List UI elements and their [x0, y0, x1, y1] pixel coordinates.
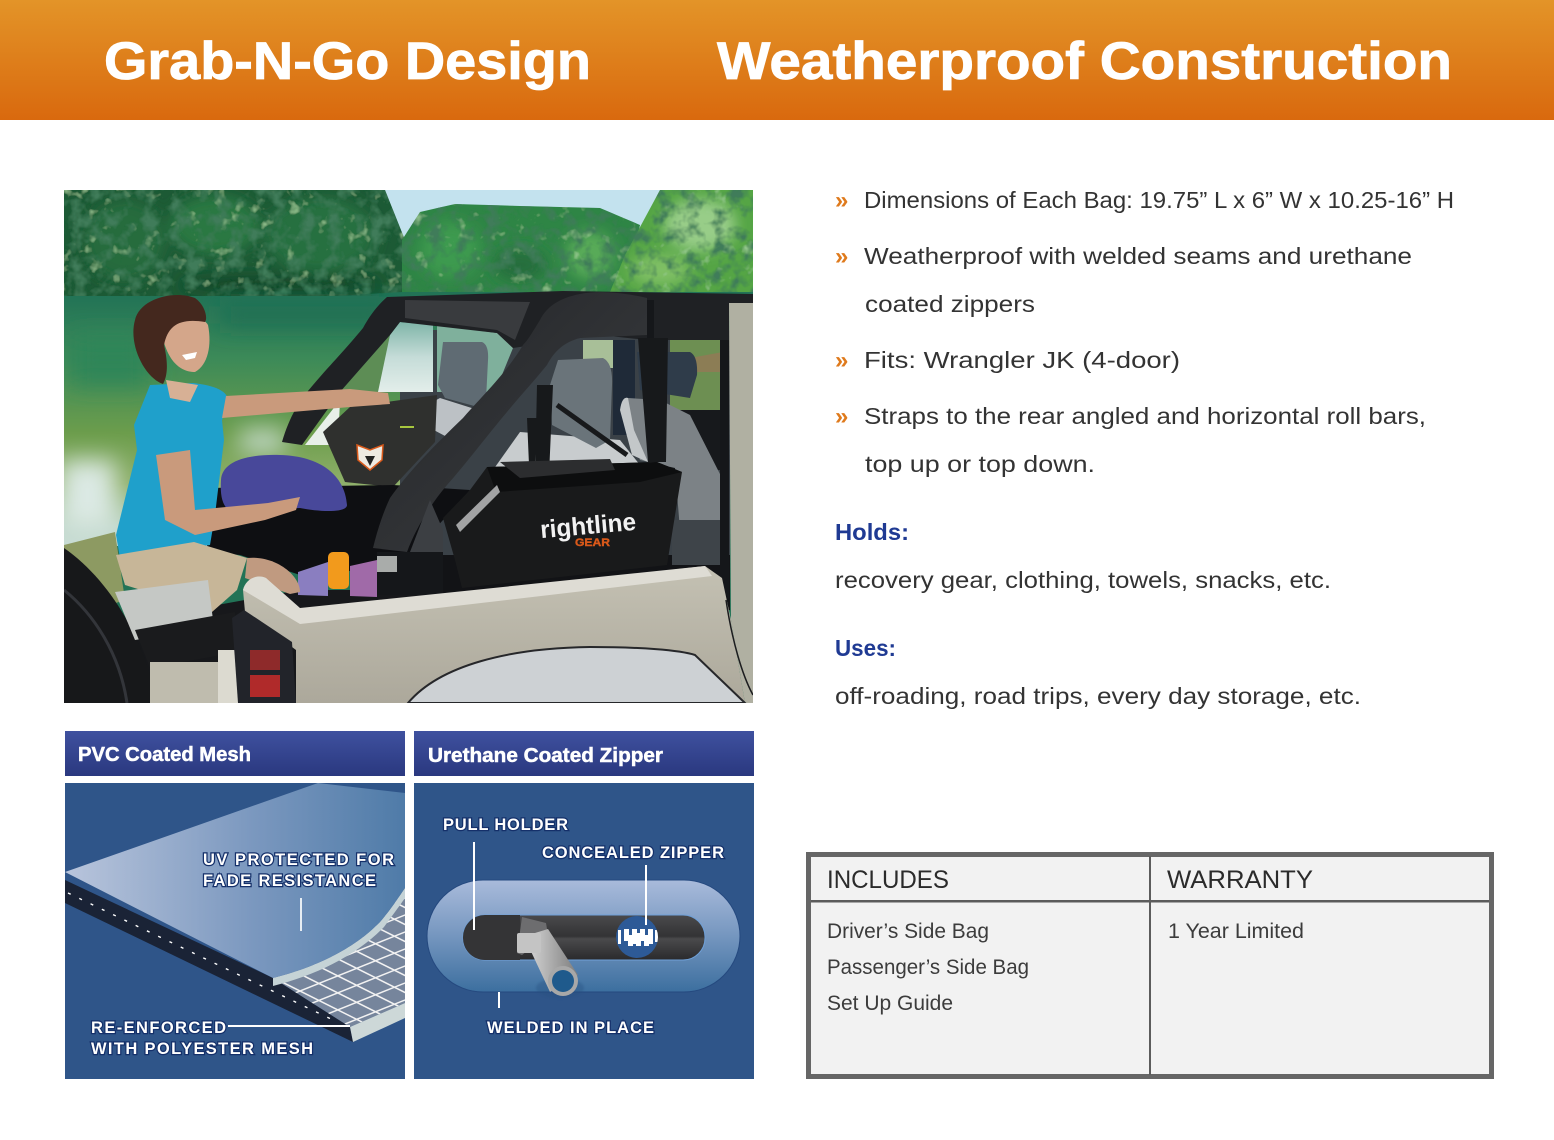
bullet: weatherproof: » — [835, 243, 848, 270]
table: includes column: INCLUDES — [827, 866, 949, 894]
table: warranty column — [1167, 866, 1313, 943]
passenger side bag with logo: rightline — [539, 508, 637, 544]
label: re-enforced polyester mesh: RE-ENFORCED — [91, 1019, 226, 1037]
label: pull holder — [443, 816, 568, 930]
spare tire — [64, 548, 135, 703]
table: includes column: Passenger’s Side Bag — [827, 956, 1029, 979]
pillar black strip — [720, 340, 729, 565]
label: uv protected: UV PROTECTED FOR — [203, 851, 394, 869]
photo: woman loading gear bags in jeep — [60, 190, 753, 703]
panel: pvc coated mesh diagram — [65, 783, 410, 1088]
interior base — [400, 330, 730, 555]
panel header: pvc coated mesh: PVC Coated Mesh — [78, 744, 251, 766]
heading: grab-n-go design: Grab-N-Go Design — [104, 32, 591, 91]
heading: weatherproof construction: Weatherproof Construction — [717, 32, 1452, 91]
panel header: urethane coated zipper: Urethane Coated Zipper — [428, 745, 663, 767]
table: warranty column: WARRANTY — [1167, 866, 1313, 894]
zipper pull — [517, 917, 584, 998]
concealed zipper teeth — [616, 916, 658, 958]
towel — [221, 455, 347, 511]
bullet: weatherproof: Weatherproof with welded seams and urethane — [864, 243, 1412, 269]
bullet: fits: » — [835, 347, 848, 374]
zipper housing pill — [427, 880, 740, 992]
bullet: fits: Fits: Wrangler JK (4-door) — [864, 347, 1180, 373]
bullet: straps: » — [835, 403, 848, 430]
bullet: straps: top up or top down. — [865, 451, 1095, 477]
bullet: weatherproof — [835, 243, 1412, 317]
front driver side bag with logo — [323, 395, 437, 487]
panel header: pvc coated mesh — [65, 731, 405, 776]
seats — [438, 342, 488, 407]
seat cushion behind bag — [495, 432, 638, 467]
dark under-structure behind tailgate — [135, 590, 445, 703]
label: re-enforced polyester mesh — [91, 1019, 350, 1058]
table: includes column — [827, 866, 1029, 1015]
mesh sheet: light lip — [273, 888, 405, 986]
label: concealed zipper: CONCEALED ZIPPER — [542, 844, 724, 862]
bullet: dimensions: Dimensions of Each Bag: 19.75” L x 6” W x 10.25-16” H — [864, 187, 1454, 213]
label: uv protected — [203, 851, 394, 931]
holds text block: recovery gear, clothing, towels, snacks, etc. — [835, 567, 1331, 593]
windows — [378, 322, 433, 392]
header banner — [0, 0, 1554, 120]
panel header: urethane coated zipper — [414, 731, 754, 776]
jeep body — [243, 566, 745, 703]
table: includes column: Driver’s Side Bag — [827, 920, 989, 943]
bullet: straps — [835, 403, 1426, 477]
bullet: dimensions: » — [835, 187, 848, 214]
bullet: weatherproof: coated zippers — [865, 291, 1035, 317]
label: re-enforced polyester mesh: WITH POLYESTER MESH — [91, 1040, 313, 1058]
front arch and soft top — [282, 291, 753, 445]
panel: urethane coated zipper diagram — [414, 783, 754, 1079]
rear straps — [638, 338, 668, 462]
mesh sheet: exposed polyester grid — [274, 889, 405, 1027]
black cargo area — [207, 485, 470, 575]
mesh sheet: top coated surface — [65, 783, 405, 978]
woman — [116, 383, 229, 558]
passenger side bag with logo: GEAR — [575, 537, 610, 549]
label: uv protected: FADE RESISTANCE — [203, 872, 376, 890]
rear roll bar tube — [373, 292, 647, 552]
tailgate — [115, 580, 214, 640]
items in cargo — [298, 562, 328, 596]
label: pull holder: PULL HOLDER — [443, 816, 568, 834]
uses text block: Uses: — [835, 635, 896, 661]
zipper slot — [463, 915, 705, 960]
passenger side bag with logo — [443, 459, 682, 555]
tail light — [232, 610, 296, 703]
tube base cylinder — [377, 552, 443, 590]
feature list — [835, 187, 1454, 477]
uses text block — [835, 635, 1361, 709]
door pillar — [729, 303, 753, 703]
holds text block — [835, 519, 1331, 593]
bullet: straps: Straps to the rear angled and horizontal roll bars, — [864, 403, 1426, 429]
table: includes column: Set Up Guide — [827, 992, 953, 1015]
uses text block: off-roading, road trips, every day storage, etc. — [835, 683, 1361, 709]
holds text block: Holds: — [835, 519, 909, 545]
includes and warranty table — [808, 854, 1492, 1076]
label: welded in place: WELDED IN PLACE — [487, 1019, 654, 1037]
mesh sheet: dark edge — [65, 880, 353, 1042]
table: warranty column: 1 Year Limited — [1168, 920, 1304, 943]
